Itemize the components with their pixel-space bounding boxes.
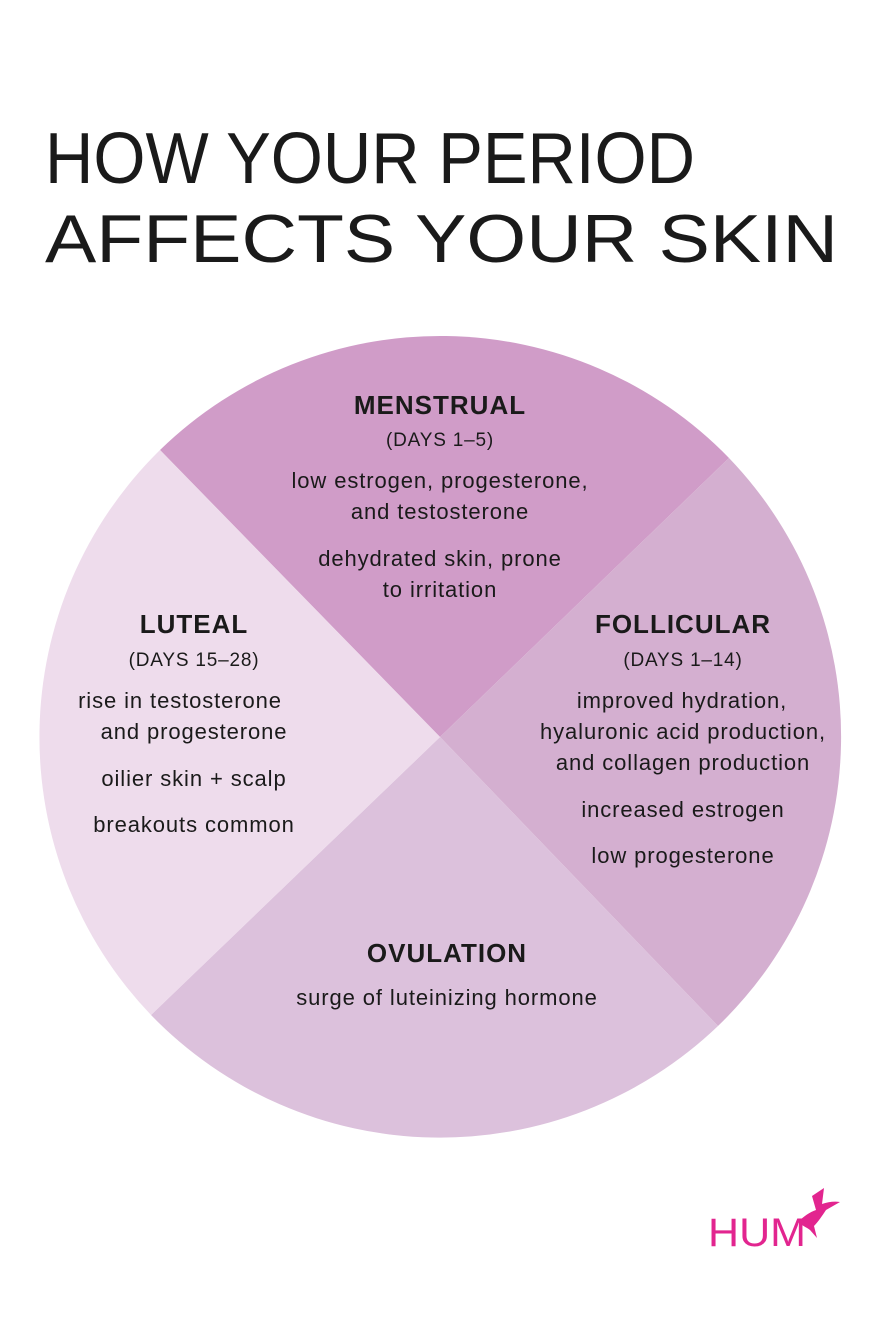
text: follicular: FOLLICULAR bbox=[595, 609, 771, 639]
text: menstrual: low estrogen, progesterone, bbox=[291, 468, 589, 493]
text: ovulation: surge of luteinizing hormone bbox=[296, 985, 598, 1010]
text: follicular: low progesterone bbox=[591, 843, 775, 868]
title: AFFECTS YOUR SKIN bbox=[45, 201, 838, 277]
text: ovulation bbox=[296, 938, 598, 1010]
text: follicular: (DAYS 1–14) bbox=[623, 650, 743, 671]
logo: HUM: HUM bbox=[708, 1211, 806, 1255]
text: menstrual: to irritation bbox=[383, 577, 497, 602]
text: follicular: hyaluronic acid production, bbox=[540, 719, 826, 744]
segment: luteal bbox=[39, 450, 440, 1015]
text: menstrual: and testosterone bbox=[351, 499, 529, 524]
text: menstrual: dehydrated skin, prone bbox=[318, 546, 562, 571]
text: menstrual: MENSTRUAL bbox=[354, 390, 526, 420]
text: luteal: oilier skin + scalp bbox=[101, 766, 287, 791]
text: menstrual bbox=[291, 390, 589, 602]
title bbox=[45, 119, 838, 277]
logo: HUM bbox=[708, 1188, 840, 1255]
icon: hummingbird bbox=[798, 1188, 840, 1238]
text: ovulation: OVULATION bbox=[367, 938, 527, 968]
text: follicular: improved hydration, bbox=[577, 688, 787, 713]
text: luteal: and progesterone bbox=[101, 719, 287, 744]
segment: ovulation bbox=[151, 737, 718, 1138]
title: HOW YOUR PERIOD bbox=[45, 119, 695, 199]
text: follicular: and collagen production bbox=[556, 750, 810, 775]
text: luteal: breakouts common bbox=[93, 812, 295, 837]
text: luteal: (DAYS 15–28) bbox=[129, 650, 259, 671]
text: luteal: rise in testosterone bbox=[78, 688, 282, 713]
text: menstrual: (DAYS 1–5) bbox=[386, 430, 494, 451]
text: follicular bbox=[540, 609, 826, 868]
cycle wheel bbox=[39, 336, 841, 1138]
segment: menstrual bbox=[160, 336, 729, 737]
text: follicular: increased estrogen bbox=[581, 797, 785, 822]
text: luteal bbox=[78, 609, 295, 837]
text: luteal: LUTEAL bbox=[140, 609, 248, 639]
segment: follicular bbox=[440, 458, 841, 1026]
